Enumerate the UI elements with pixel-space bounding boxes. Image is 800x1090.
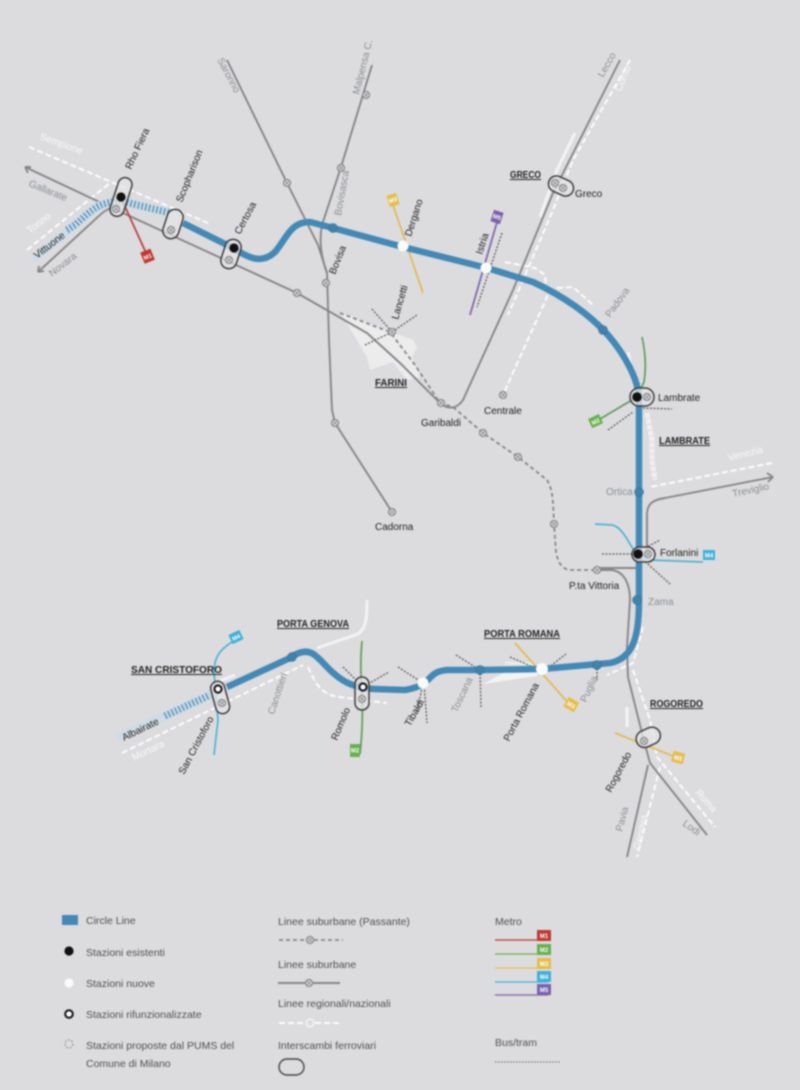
legend: station and line types [62, 915, 234, 1070]
legend: rail lines: Linee suburbane [278, 959, 356, 971]
suburban passante line [340, 313, 597, 570]
metro lines [122, 200, 703, 758]
station labels: Bovisasca [333, 169, 352, 217]
station labels: Certosa [233, 200, 259, 236]
area labels [131, 170, 710, 710]
metro badges [140, 193, 715, 764]
station labels: Garibaldi [421, 418, 461, 429]
station labels: Cadorna [375, 522, 414, 533]
area labels: PORTA ROMANA [484, 629, 560, 640]
station labels: Vittuone [32, 230, 68, 261]
station labels: Scopharison [175, 148, 206, 204]
area labels: ROGOREDO [650, 699, 703, 710]
station labels: Bovisa [328, 244, 349, 276]
area labels: GRECO [510, 170, 541, 181]
legend: station and line types: Comune di Milano [86, 1058, 171, 1070]
station labels: Genova [632, 814, 650, 851]
station labels: Novara [47, 251, 80, 279]
metro badges: M2 [591, 418, 602, 427]
station labels: Tibaldi [403, 698, 427, 728]
legend: metro and bus [495, 916, 560, 1062]
station labels: Zama [648, 597, 674, 608]
station labels: Venezia [727, 445, 765, 464]
metro M1 red branch [122, 200, 147, 255]
station labels: Porta Romana [502, 681, 542, 743]
legend: rail lines: Linee suburbane (Passante) [278, 916, 410, 928]
station labels: Padova [604, 286, 633, 320]
railway node areas [340, 312, 655, 684]
circle line main route [183, 222, 639, 690]
station labels: Ortica [606, 487, 633, 498]
station labels [25, 39, 771, 851]
station labels: Centrale [484, 406, 522, 417]
station labels: Lodi [680, 818, 702, 838]
station labels: Canottieri [266, 672, 290, 716]
station labels: P.ta Vittoria [569, 581, 620, 592]
station labels: Istria [474, 232, 492, 256]
station labels: Puglia [579, 674, 601, 704]
metro badges: M3 [565, 701, 576, 711]
metro badges: M3 [673, 755, 683, 763]
station labels: Treviglio [731, 481, 771, 500]
metro badges: M4 [705, 554, 714, 560]
metro M2 green Romolo [360, 641, 362, 754]
legend: station and line types: Stazioni nuove [86, 978, 155, 990]
suburban lines [25, 60, 773, 857]
station labels: Saronno [214, 56, 242, 95]
station labels: Sempione [38, 131, 84, 157]
station labels: Roma [693, 788, 719, 815]
legend: metro and bus: Bus/tram [495, 1037, 537, 1049]
station labels: Romolo [330, 706, 353, 742]
station labels: Dergano [403, 198, 426, 238]
station labels: San Cristoforo [177, 714, 217, 776]
station labels: Lambrate [658, 393, 701, 404]
hatched extensions of the circle line [33, 202, 210, 738]
metro M2 green Lambrate [595, 337, 645, 422]
area labels: PORTA GENOVA [277, 619, 349, 630]
stations on the circle line [288, 224, 643, 688]
area labels: FARINI [375, 378, 407, 389]
metro badges: M3 [388, 197, 399, 205]
station labels: Pavia [614, 805, 631, 833]
station labels: Torino [25, 211, 54, 236]
station labels: Como [614, 64, 634, 93]
metro badges: M1 [143, 253, 154, 262]
legend: rail lines [278, 916, 410, 1075]
station labels: Albairate [120, 716, 161, 744]
station labels: Mortara [130, 739, 167, 764]
legend: rail lines: Linee regionali/nazionali [278, 998, 391, 1010]
station labels: Malpensa C. [351, 39, 375, 96]
railway interchanges [108, 173, 663, 750]
station labels: Lancetti [390, 284, 411, 321]
legend: metro and bus: Metro [495, 916, 522, 928]
station labels: Rogoredo [604, 750, 634, 794]
metro M3 yellow Dergano [393, 205, 423, 293]
regional and national lines [27, 60, 772, 857]
station labels: Gallarate [27, 179, 69, 204]
legend: station and line types: Stazioni rifunzionalizzate [86, 1009, 202, 1021]
proposed stations on suburban lines [283, 91, 601, 574]
legend: station and line types: Circle Line [86, 915, 136, 927]
metro badges: M5 [492, 214, 502, 222]
station labels: Forlanini [660, 548, 698, 559]
legend: station and line types: Stazioni proposte dal PUMS del [86, 1040, 234, 1052]
legend: metro and bus: M4 [540, 975, 549, 981]
bus and tram dashed lines [343, 233, 672, 723]
legend: metro and bus: M1 [540, 934, 549, 940]
legend: metro and bus: M2 [540, 948, 549, 954]
station labels: Lecco [596, 51, 619, 80]
area labels: LAMBRATE [659, 436, 710, 447]
metro M3 yellow Rogoredo [615, 733, 678, 758]
station labels: Greco [575, 189, 603, 200]
legend: rail lines: Interscambi ferroviari [278, 1040, 376, 1052]
metro badges: M2 [351, 748, 360, 754]
legend: metro and bus: M5 [540, 988, 549, 994]
metro M4 blue San Cristoforo [214, 640, 235, 755]
metro M5 purple Istria [470, 222, 497, 315]
metro badges: M4 [232, 634, 242, 643]
legend: station and line types: Stazioni esistenti [86, 947, 165, 959]
legend: metro and bus: M3 [540, 962, 549, 968]
area labels: SAN CRISTOFORO [131, 665, 222, 676]
metro M4 blue Forlanini [595, 524, 703, 562]
station labels: Rho Fiera [124, 126, 152, 171]
metro M3 yellow Porta Romana [515, 643, 571, 706]
station labels: Toscana [450, 675, 476, 714]
